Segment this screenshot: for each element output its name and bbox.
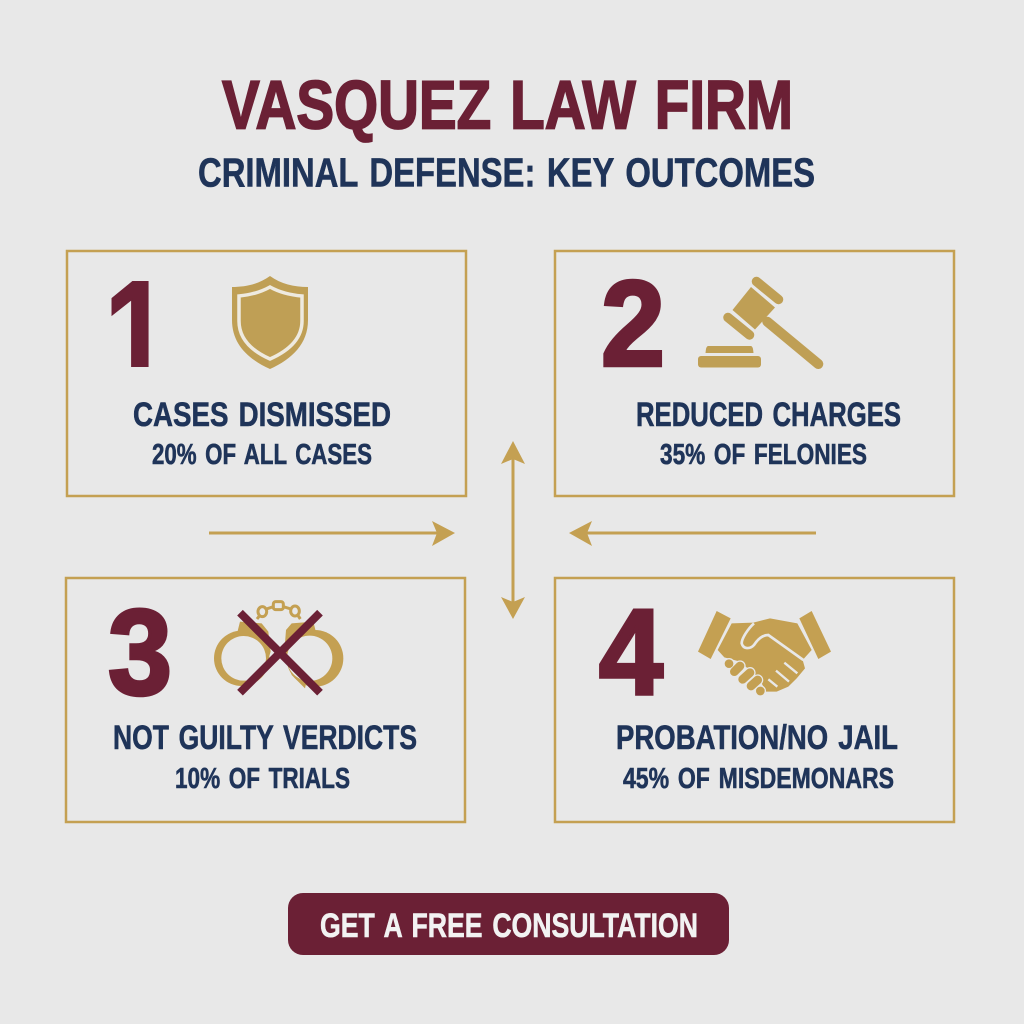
icon: gavel [698,282,818,368]
statistic: 45% OF MISDEMONARS [623,763,894,795]
subtitle: CRIMINAL DEFENSE: KEY OUTCOMES [198,150,815,196]
button label: GET A FREE CONSULTATION [320,907,698,945]
heading: PROBATION/NO JAIL [616,719,898,757]
heading: NOT GUILTY VERDICTS [113,719,417,757]
icon: crossed handcuffs [214,602,343,693]
heading: REDUCED CHARGES [636,396,901,434]
number 1: 1 [104,249,170,417]
heading: CASES DISMISSED [133,396,391,434]
number 3: 3 [108,584,172,720]
title: VASQUEZ LAW FIRM [222,66,793,144]
arrow: left to center [209,521,455,546]
button: free consultation [288,893,729,955]
statistic: 10% OF TRIALS [175,763,350,795]
panel: probation / no jail [555,578,954,822]
statistic: 35% OF FELONIES [660,439,867,471]
number 4: 4 [599,584,663,720]
icon: shield [232,276,308,369]
panel: not guilty verdicts [66,578,465,822]
arrow: right to center [569,521,816,546]
statistic: 20% OF ALL CASES [152,439,372,471]
icon: handshake [698,611,831,692]
number 2: 2 [601,256,665,392]
panel: reduced charges [555,251,954,496]
panel: cases dismissed [67,249,466,496]
arrow: vertical double [501,441,525,619]
